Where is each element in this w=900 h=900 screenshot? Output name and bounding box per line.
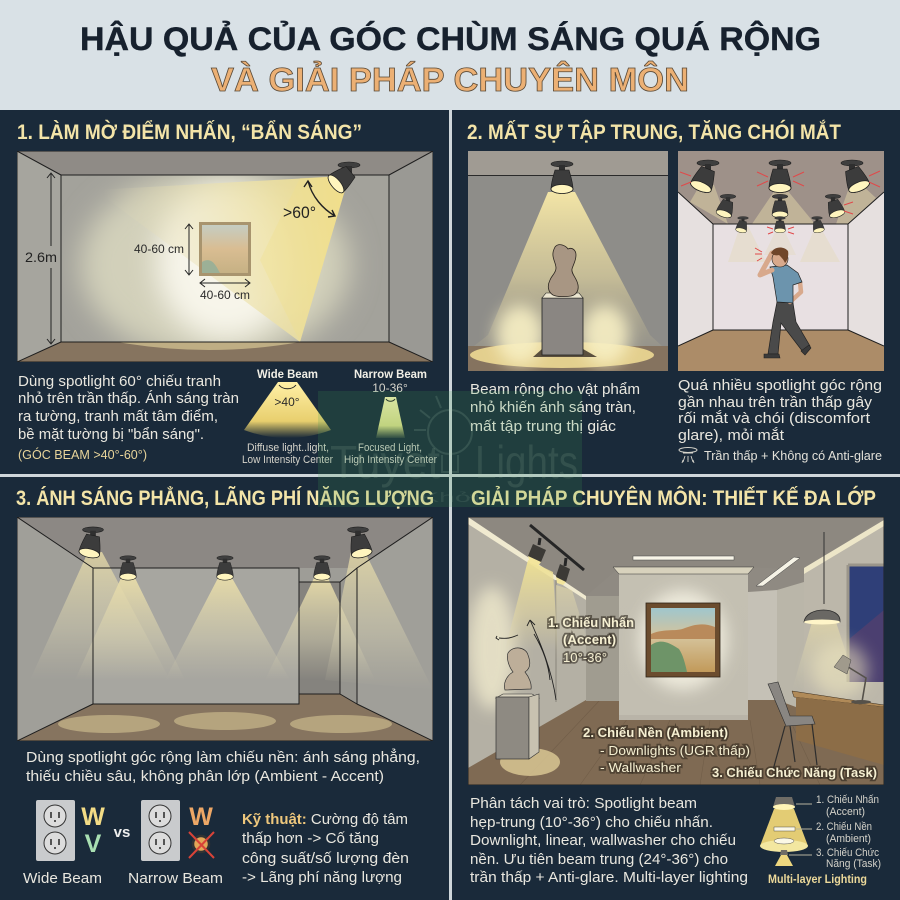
heading 3: 3. ÁNH SÁNG PHẲNG, LÃNG PHÍ NĂNG LƯỢNG xyxy=(16,487,434,510)
comparison: wide beam outlets: Wide Beam xyxy=(23,871,102,887)
multi-layer legend diagram: 1. Chiếu Nhấn xyxy=(816,794,879,806)
label: accent: (Accent) xyxy=(563,632,616,647)
description 4: trần thấp + Anti-glare. Multi-layer lighting xyxy=(470,869,748,886)
description 2 right: glare), mỏi mắt xyxy=(678,427,785,444)
dimension labels: 40-60 cm xyxy=(134,242,184,256)
comparison: wide beam outlets xyxy=(23,800,105,887)
sculpture illustration xyxy=(468,151,668,371)
wide beam diagram: Low Intensity Center xyxy=(242,454,333,466)
multi-layer legend diagram: (Accent) xyxy=(826,806,865,818)
technique note: công suất/số lượng đèn xyxy=(242,850,409,867)
technique note: thấp hơn -> Cố tăng xyxy=(242,830,379,847)
statue xyxy=(548,245,578,297)
wide beam diagram: Wide Beam xyxy=(257,367,318,381)
description 2 left: Beam rộng cho vật phẩm xyxy=(470,381,640,398)
narrow beam diagram xyxy=(344,367,437,466)
narrow beam diagram: Focused Light, xyxy=(358,442,422,454)
dimension annotations xyxy=(47,173,335,344)
comparison: wide beam outlets: W xyxy=(81,803,105,831)
person shielding eyes xyxy=(760,247,811,358)
description 4: hẹp-trung (10°-36°) cho chiếu nhấn. xyxy=(470,814,713,831)
description 1: bề mặt tường bị "bẩn sáng". xyxy=(18,426,204,443)
multi-layer room illustration xyxy=(468,517,884,785)
icon group: ceiling spotlights 3 xyxy=(78,527,373,580)
narrow beam diagram: High Intensity Center xyxy=(344,454,437,466)
description 4: nền. Ưu tiên beam trung (24°-36°) cho xyxy=(470,851,728,868)
panel 2: loss of focus, glare xyxy=(467,120,884,463)
label: accent xyxy=(548,615,634,665)
description 2 right xyxy=(678,377,882,444)
heading 1: 1. LÀM MỜ ĐIỂM NHẤN, “BẨN SÁNG” xyxy=(17,120,362,144)
description 1: Dùng spotlight 60° chiếu tranh xyxy=(18,373,221,390)
framed painting xyxy=(646,603,720,677)
label: ambient: - Downlights (UGR thấp) xyxy=(600,743,750,758)
room illustration 1 xyxy=(17,151,433,362)
multi-layer legend diagram xyxy=(760,794,881,886)
multi-layer legend diagram: 2. Chiếu Nền xyxy=(816,821,872,833)
label: task: 3. Chiếu Chức Năng (Task) xyxy=(712,765,877,780)
technique note: Kỹ thuật: Cường độ tâm xyxy=(242,811,408,828)
description 2 right: rối mắt và chói (discomfort xyxy=(678,410,871,427)
technique note: -> Lãng phí năng lượng xyxy=(242,869,402,886)
icon: track with spotlights xyxy=(528,525,584,585)
watermark xyxy=(318,391,582,507)
technique note xyxy=(242,811,409,886)
multi-layer legend diagram: Năng (Task) xyxy=(826,858,881,870)
description 4: Phân tách vai trò: Spotlight beam xyxy=(470,795,697,812)
comparison: narrow beam outlets: W xyxy=(189,803,213,831)
comparison: wide beam outlets: V xyxy=(85,830,102,858)
panel 3: flat light, wasted energy xyxy=(16,487,434,887)
panel 1: blurred accent xyxy=(17,120,437,466)
description 2 right: gần nhau trên trần thấp gây xyxy=(678,394,873,411)
wide beam diagram: >40° xyxy=(274,395,300,409)
multi-layer legend diagram: 3. Chiếu Chức xyxy=(816,847,879,859)
label: accent: 10°-36° xyxy=(563,650,607,665)
description 4 xyxy=(470,795,748,886)
picture on wall xyxy=(199,222,251,276)
anti-glare note: Trần thấp + Không có Anti-glare xyxy=(704,448,882,463)
vs label: vs xyxy=(114,824,130,841)
description 3: thiếu chiều sâu, không phân lớp (Ambient - Accent) xyxy=(26,768,384,785)
icon group: glare rays xyxy=(680,171,880,261)
label: ambient xyxy=(583,725,750,775)
description 3: Dùng spotlight góc rộng làm chiếu nền: ánh sáng phẳng, xyxy=(26,748,420,766)
glare room illustration xyxy=(678,151,884,371)
dimension labels: >60° xyxy=(283,203,316,222)
dimension labels xyxy=(25,203,316,302)
title line one: HẬU QUẢ CỦA GÓC CHÙM SÁNG QUÁ RỘNG xyxy=(80,21,821,57)
comparison: narrow beam outlets: Narrow Beam xyxy=(128,871,223,887)
description 1: nhỏ trên trần thấp. Ánh sáng tràn xyxy=(18,390,239,407)
watermark: Tuyet xyxy=(330,436,440,488)
description 3 xyxy=(26,748,420,785)
label: accent: 1. Chiếu Nhấn xyxy=(548,615,634,630)
icon group: ceiling spotlights xyxy=(689,160,871,234)
comparison: narrow beam outlets xyxy=(128,800,223,887)
room illustration 3 xyxy=(17,517,433,741)
description 2 left xyxy=(470,381,640,435)
narrow beam diagram: 10-36° xyxy=(372,381,408,395)
dimension labels: 2.6m xyxy=(25,249,57,265)
description 1: ra tường, tranh mất tâm điểm, xyxy=(18,408,218,425)
description 1 xyxy=(18,373,239,462)
wide beam diagram xyxy=(242,367,333,466)
title line two: VÀ GIẢI PHÁP CHUYÊN MÔN xyxy=(211,60,689,98)
watermark: Lights xyxy=(475,436,578,488)
icon: ceiling light xyxy=(679,448,697,463)
label: ambient: 2. Chiếu Nền (Ambient) xyxy=(583,725,728,740)
narrow beam diagram: Narrow Beam xyxy=(354,367,427,381)
icon: spotlight 1 xyxy=(325,162,360,195)
panel 4: professional solution xyxy=(468,486,884,886)
description 2 left: nhỏ khiến ánh sáng tràn, xyxy=(470,399,636,416)
heading 2: 2. MẤT SỰ TẬP TRUNG, TĂNG CHÓI MẮT xyxy=(467,120,841,144)
description 2 left: mất tập trung thị giác xyxy=(470,418,617,435)
description 4: Downlight, linear, wallwasher cho chiếu xyxy=(470,832,736,849)
label: ambient: - Wallwasher xyxy=(600,760,682,775)
description 1: (GÓC BEAM >40°-60°) xyxy=(18,447,147,462)
wide beam diagram: Diffuse light..light, xyxy=(247,442,329,454)
description 2 right: Quá nhiều spotlight góc rộng xyxy=(678,377,882,394)
dimension labels: 40-60 cm xyxy=(200,288,250,302)
icon: spotlight 2 xyxy=(551,161,573,194)
multi-layer legend diagram: Multi-layer Lighting xyxy=(768,872,867,886)
header band xyxy=(0,0,900,110)
watermark: Khởi xyxy=(420,489,480,505)
multi-layer legend diagram: (Ambient) xyxy=(826,833,871,845)
